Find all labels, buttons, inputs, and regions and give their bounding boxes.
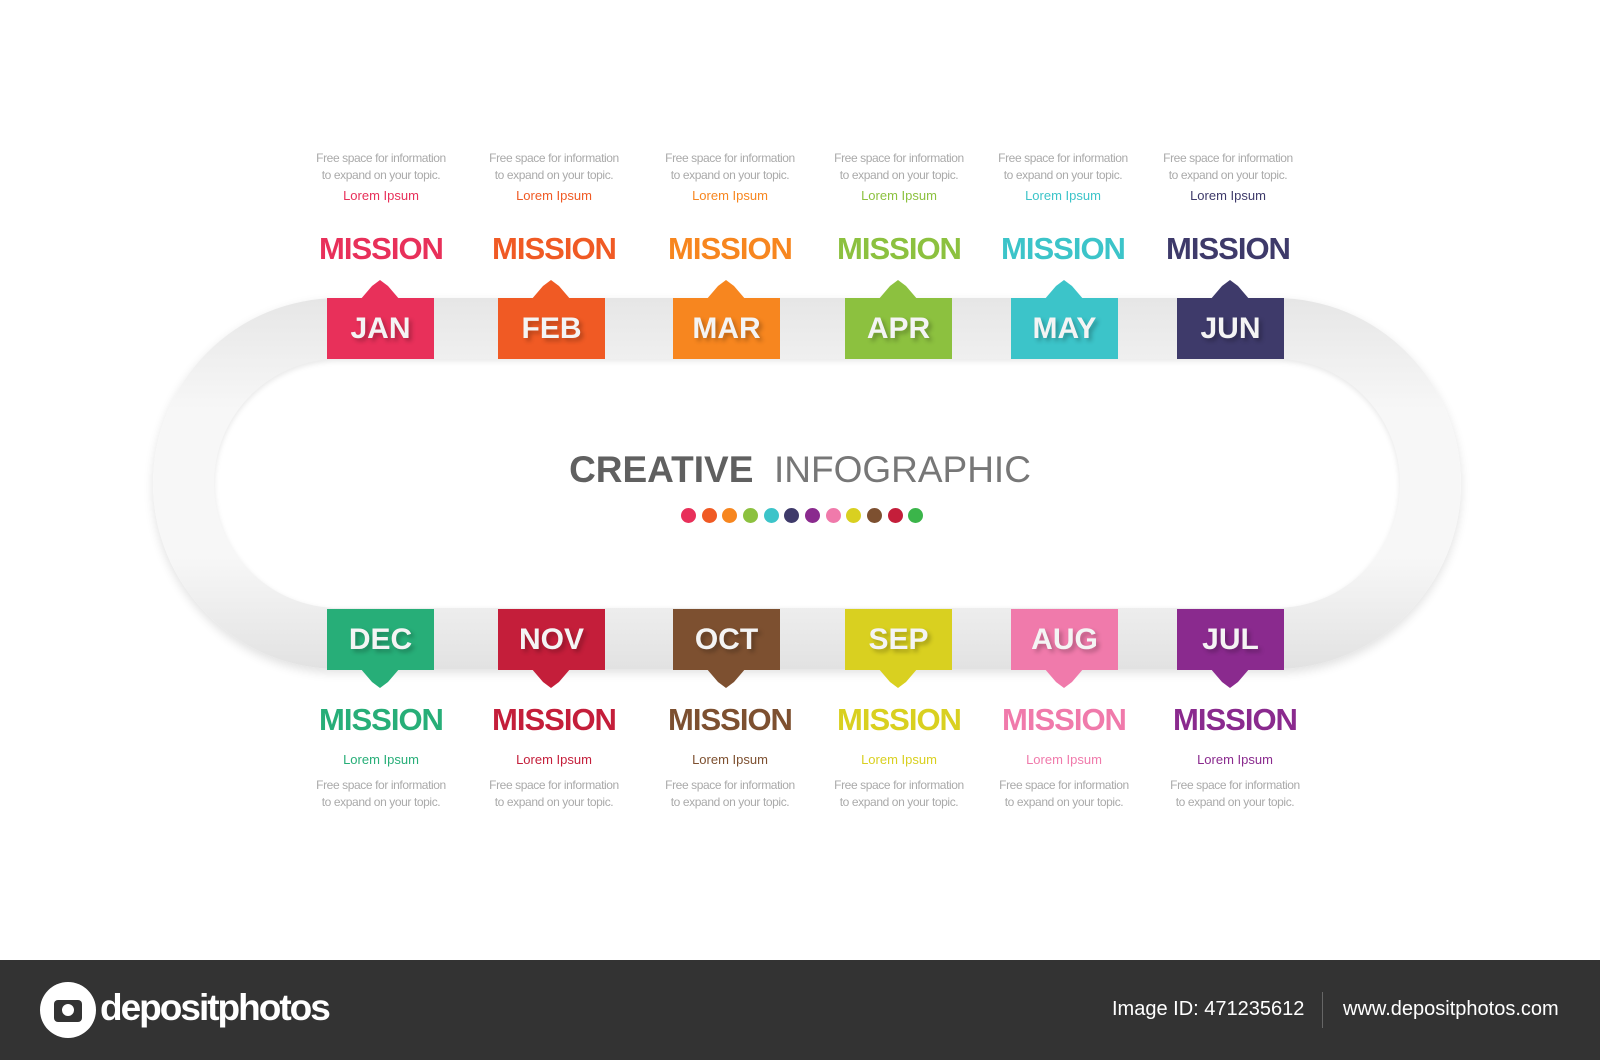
top column: FEB [489,151,619,266]
top column: JAN: Free space for information [316,151,446,165]
image id: Image ID: 471235612 [1112,998,1304,1020]
top column: MAR [665,151,795,266]
top column: MAR: Free space for information [665,151,795,165]
top column: MAY: MISSION [1001,231,1125,266]
top column: MAR: Lorem Ipsum [692,188,768,203]
tab: APR [845,298,952,359]
bottom column: DEC: Free space for information [316,778,446,792]
top column: MAR: to expand on your topic. [671,168,789,182]
divider [1322,992,1323,1028]
bottom column: AUG: Free space for information [999,778,1129,792]
tab: JUL [1177,609,1284,670]
tab: SEP: SEP [868,623,929,656]
tab: OCT [673,609,780,670]
top column: APR: to expand on your topic. [840,168,958,182]
top column: FEB: Free space for information [489,151,619,165]
tab: JUN [1177,298,1284,359]
bottom column: OCT: to expand on your topic. [671,795,789,809]
logo text: depositphotos [100,987,329,1028]
top column: APR: MISSION [837,231,961,266]
bottom column: NOV: Lorem Ipsum [516,752,592,767]
bottom column: SEP: Lorem Ipsum [861,752,937,767]
bottom column: DEC: MISSION [319,702,443,737]
bottom column: AUG [999,702,1129,809]
top column: JAN: Lorem Ipsum [343,188,419,203]
pill track [153,298,1461,669]
bottom column: DEC [316,702,446,809]
icon: camera logo [40,982,96,1038]
tab: JUN: JUN [1200,312,1260,345]
tab: MAY: MAY [1033,312,1096,345]
top column: FEB: to expand on your topic. [495,168,613,182]
top column: FEB: Lorem Ipsum [516,188,592,203]
top column: JAN: MISSION [319,231,443,266]
tab: APR: APR [867,312,930,345]
top column: MAY: to expand on your topic. [1004,168,1122,182]
bottom column: DEC: to expand on your topic. [322,795,440,809]
bottom column: AUG: to expand on your topic. [1005,795,1123,809]
bottom column: AUG: Lorem Ipsum [1026,752,1102,767]
tab: AUG: AUG [1031,623,1098,656]
top column: APR [834,151,964,266]
bottom column: JUL: MISSION [1173,702,1297,737]
top column: MAY: Lorem Ipsum [1025,188,1101,203]
bottom column: OCT: MISSION [668,702,792,737]
footer bar [0,960,1600,1060]
tab: DEC: DEC [349,623,412,656]
bottom column: DEC: Lorem Ipsum [343,752,419,767]
bottom column: JUL: Free space for information [1170,778,1300,792]
tab: JAN: JAN [350,312,410,345]
top column: MAY: Free space for information [998,151,1128,165]
tab: NOV [498,609,605,670]
bottom column: JUL: to expand on your topic. [1176,795,1294,809]
bottom column: NOV: to expand on your topic. [495,795,613,809]
bottom column: OCT: Free space for information [665,778,795,792]
top column: JUN: Lorem Ipsum [1190,188,1266,203]
top column: JUN: Free space for information [1163,151,1293,165]
tab: MAR: MAR [692,312,761,345]
tab: NOV: NOV [519,623,584,656]
bottom column: OCT [665,702,795,809]
bottom column: SEP: MISSION [837,702,961,737]
top column: JUN: to expand on your topic. [1169,168,1287,182]
bottom column: NOV [489,702,619,809]
tab: DEC [327,609,434,670]
bottom column: OCT: Lorem Ipsum [692,752,768,767]
bottom column: SEP: to expand on your topic. [840,795,958,809]
top column: JAN [316,151,446,266]
top column: APR: Free space for information [834,151,964,165]
bottom column: NOV: Free space for information [489,778,619,792]
top column: MAY [998,151,1128,266]
top column: FEB: MISSION [492,231,616,266]
tab: FEB: FEB [522,312,582,345]
bottom column: JUL: Lorem Ipsum [1197,752,1273,767]
bottom column: JUL [1170,702,1300,809]
colour dots [681,508,923,523]
tab: MAY [1011,298,1118,359]
top column: MAR: MISSION [668,231,792,266]
bottom column: NOV: MISSION [492,702,616,737]
top column: APR: Lorem Ipsum [861,188,937,203]
tab: OCT: OCT [695,623,758,656]
bottom column: SEP [834,702,964,809]
top column: JUN [1163,151,1293,266]
bottom column: AUG: MISSION [1002,702,1126,737]
bottom column: SEP: Free space for information [834,778,964,792]
tab: MAR [673,298,780,359]
tab: SEP [845,609,952,670]
top column: JUN: MISSION [1166,231,1290,266]
website: www.depositphotos.com [1343,998,1559,1020]
tab: JAN [327,298,434,359]
top column: JAN: to expand on your topic. [322,168,440,182]
tab: FEB [498,298,605,359]
title: CREATIVE INFOGRAPHIC [569,449,1031,490]
tab: AUG [1011,609,1118,670]
tab: JUL: JUL [1202,623,1259,656]
